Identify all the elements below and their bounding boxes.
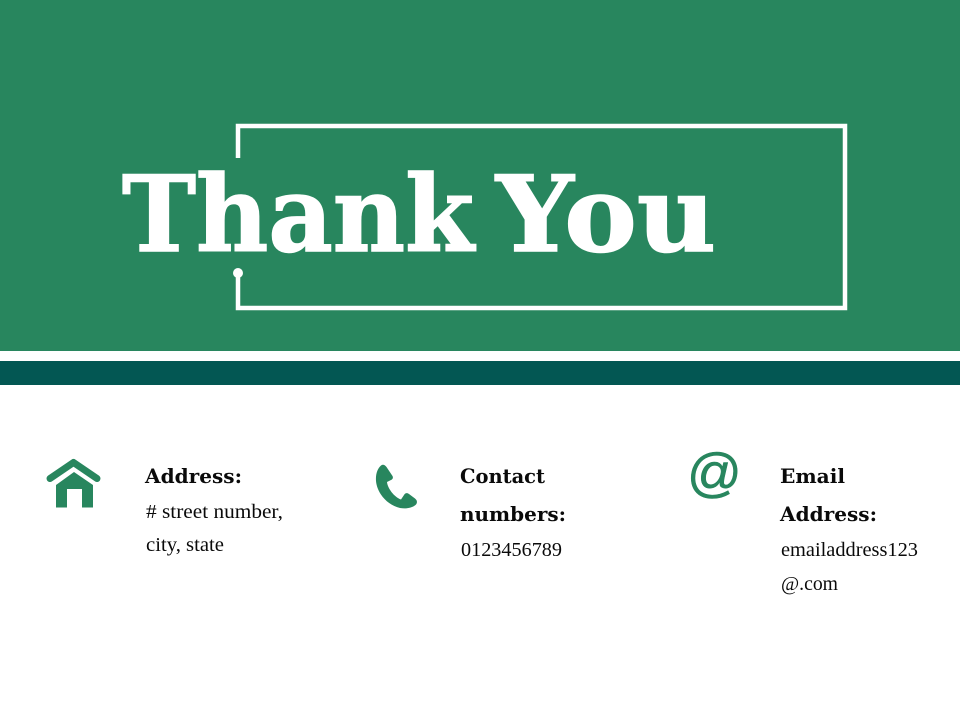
address heading: Address: <box>144 464 242 488</box>
contact heading: Contact <box>460 464 546 488</box>
email details <box>781 540 918 595</box>
address details <box>146 502 283 556</box>
panel: green header banner <box>0 0 960 351</box>
email details: @.com <box>781 574 838 595</box>
contact number: 0123456789 <box>461 540 562 561</box>
contact heading: numbers: <box>460 502 566 526</box>
icon: at sign: @ <box>687 443 742 503</box>
email heading <box>779 464 877 526</box>
contact heading <box>460 464 566 526</box>
title frame with dot terminator <box>233 126 845 308</box>
email details: emailaddress123 <box>781 540 918 561</box>
title: Thank <box>122 152 476 276</box>
title: You <box>495 152 716 276</box>
panel: contact numbers <box>376 464 566 561</box>
title <box>122 152 716 276</box>
icon: house <box>50 462 97 508</box>
icon: telephone handset <box>376 465 417 508</box>
dark teal band <box>0 361 960 385</box>
address details: city, state <box>146 535 224 556</box>
email heading: Address: <box>779 502 877 526</box>
panel: email address <box>687 443 918 595</box>
address details: # street number, <box>146 502 283 523</box>
panel: address <box>50 462 283 556</box>
email heading: Email <box>780 464 845 488</box>
